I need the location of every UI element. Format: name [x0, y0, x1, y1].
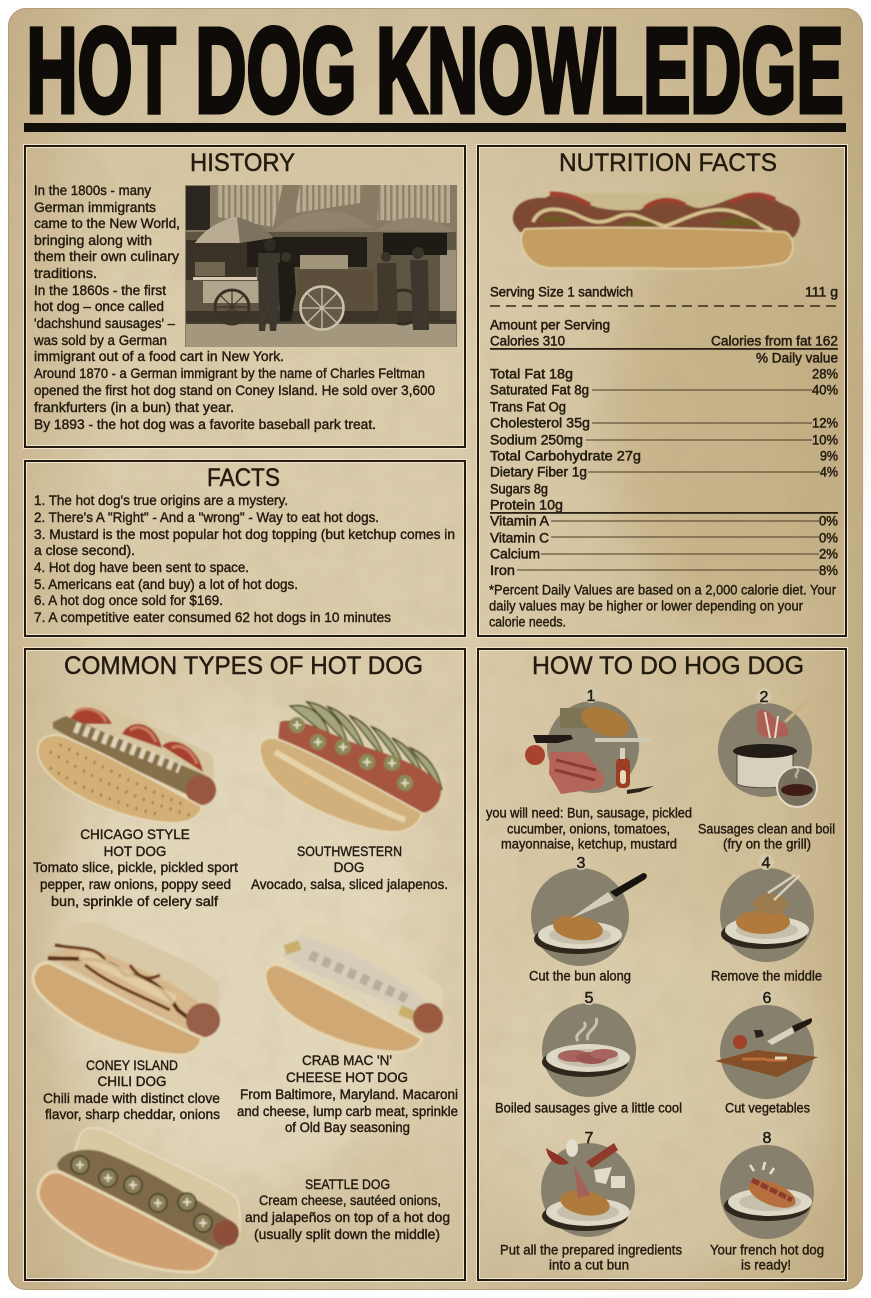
text: coney island: CONEY ISLAND: [86, 1058, 178, 1073]
text: southwestern: Avocado, salsa, sliced jalapenos.: [251, 877, 448, 892]
nutrition label: Vitamin A: [490, 514, 549, 528]
history text: hot dog – once called: [34, 299, 164, 314]
nutrition label: Trans Fat Og: [490, 400, 566, 414]
step 5 icon: boiled sausages: 5: [585, 990, 594, 1007]
facts list: 7. A competitive eater consumed 62 hot dogs in 10 minutes: [34, 610, 391, 625]
panel: history: [25, 146, 465, 447]
text: chicago style: pepper, raw onions, poppy seed: [40, 877, 231, 892]
heading: nutrition facts: NUTRITION FACTS: [559, 149, 777, 177]
step 8 icon: finished hot dog: [720, 1129, 814, 1239]
step 1 text: [486, 806, 692, 852]
illustration: hot dog: [513, 193, 800, 269]
step 4 icon: remove the middle: 4: [762, 855, 771, 872]
facts list: 4. Hot dog have been sent to space.: [34, 560, 249, 575]
history text: opened the first hot dog stand on Coney Island. He sold over 3,600: [34, 383, 435, 398]
text: chicago style: Tomato slice, pickle, pickled sport: [33, 860, 238, 875]
nutrition label: Iron: [490, 563, 515, 578]
step 8 icon: finished hot dog: 8: [763, 1130, 772, 1147]
step 6 icon: cut vegetables: 6: [763, 990, 772, 1007]
text: crab mac: CHEESE HOT DOG: [286, 1070, 408, 1085]
history text: German immigrants: [34, 200, 156, 215]
nutrition label: 8%: [819, 563, 838, 578]
illustration: seattle dog: [38, 1128, 240, 1272]
text: seattle dog: Cream cheese, sautéed onions,: [259, 1193, 441, 1208]
history text: bringing along with: [34, 233, 152, 248]
step 1 icon: ingredients: [525, 687, 654, 794]
nutrition label: Amount per Serving: [490, 318, 610, 332]
step 8 text: [710, 1242, 824, 1272]
nutrition label: Total Carbohydrate 27g: [490, 448, 641, 464]
nutrition label: Calcium: [490, 546, 540, 562]
text: southwestern: SOUTHWESTERN: [297, 844, 402, 859]
illustration: coney island chili dog: [33, 922, 220, 1055]
text: crab mac: of Old Bay seasoning: [285, 1120, 410, 1135]
nutrition label: 111 g: [805, 284, 838, 300]
step 4 text: Remove the middle: [711, 968, 822, 984]
heading: facts: FACTS: [207, 464, 280, 492]
nutrition label: 10%: [812, 432, 838, 448]
step 7 text: [500, 1242, 682, 1272]
text: crab mac: From Baltimore, Maryland. Macaroni: [240, 1087, 458, 1102]
history text: [33, 183, 435, 432]
history text: In the 1800s - many: [34, 183, 151, 198]
step 8 text: is ready!: [741, 1258, 791, 1272]
step 3 text: Cut the bun along: [529, 968, 631, 984]
text: seattle dog: SEATTLE DOG: [305, 1177, 390, 1192]
facts list: 3. Mustard is the most popular hot dog topping (but ketchup comes in: [34, 527, 455, 542]
heading: how to: HOW TO DO HOG DOG: [532, 652, 804, 680]
nutrition label: 0%: [819, 530, 838, 546]
step 8 text: Your french hot dog: [710, 1242, 824, 1258]
text: chicago style: bun, sprinkle of celery salf: [51, 894, 218, 909]
nutrition label: 4%: [820, 464, 838, 480]
panel: how to do hog dog: [478, 649, 846, 1280]
step 1 icon: ingredients: 1: [587, 688, 596, 705]
step 1 text: mayonnaise, ketchup, mustard: [501, 836, 677, 852]
step 7 icon: prepared ingredients: [541, 1130, 635, 1237]
panel: nutrition facts: [478, 146, 846, 636]
facts list: 5. Americans eat (and buy) a lot of hot dogs.: [34, 577, 298, 592]
facts list: 1. The hot dog's true origins are a mystery.: [34, 493, 288, 508]
nutrition label: Saturated Fat 8g: [490, 382, 589, 398]
history text: them their own culinary: [34, 249, 179, 264]
step 3 icon: cut bun: 3: [577, 855, 586, 872]
text: crab mac: and cheese, lump carb meat, sprinkle: [237, 1104, 458, 1119]
nutrition label: Calories 310: [490, 334, 565, 348]
facts list: 6. A hot dog once sold for $169.: [34, 593, 223, 608]
nutrition label: Vitamin C: [490, 530, 549, 546]
step 2 icon: boil: [718, 688, 817, 807]
text: chicago style: [33, 827, 238, 909]
text: seattle dog: [245, 1177, 450, 1242]
history text: Around 1870 - a German immigrant by the name of Charles Feltman: [34, 366, 425, 381]
history text: In the 1860s - the first: [34, 283, 166, 298]
step 1 text: you will need: Bun, sausage, pickled: [486, 806, 692, 820]
step 1 text: cucumber, onions, tomatoes,: [507, 822, 670, 836]
text: coney island: [43, 1058, 220, 1122]
history text: By 1893 - the hot dog was a favorite baseball park treat.: [34, 417, 376, 432]
text: chicago style: CHICAGO STYLE: [80, 827, 190, 842]
text: southwestern: DOG: [334, 860, 364, 875]
nutrition label: 0%: [819, 514, 838, 528]
panel: common types of hot dog: [25, 649, 465, 1280]
text: crab mac: CRAB MAC 'N': [302, 1053, 392, 1068]
step 3 icon: cut bun: [531, 854, 647, 966]
text: chicago style: HOT DOG: [104, 844, 166, 859]
step 4 icon: remove the middle: [720, 854, 814, 962]
nutrition label: 12%: [812, 416, 838, 430]
nutrition label: 9%: [820, 448, 838, 464]
nutrition label: [490, 284, 838, 578]
footnote: [489, 582, 836, 630]
text: seattle dog: (usually split down the middle): [254, 1227, 440, 1242]
text: seattle dog: and jalapeños on top of a hot dog: [245, 1210, 450, 1225]
photo: hot dog cart: [185, 185, 457, 347]
step 2 text: Sausages clean and boil: [698, 822, 835, 836]
panel: facts: [25, 461, 465, 636]
step 6 text: Cut vegetables: [725, 1100, 810, 1116]
nutrition label: % Daily value: [756, 350, 838, 366]
nutrition label: 28%: [812, 366, 838, 382]
step 2 text: [698, 822, 835, 852]
nutrition label: Cholesterol 35g: [490, 416, 590, 430]
history text: was sold by a German: [33, 333, 167, 348]
history text: traditions.: [34, 266, 97, 281]
heading: common types: COMMON TYPES OF HOT DOG: [64, 652, 423, 680]
illustration: crab mac and cheese hot dog: [265, 923, 443, 1052]
history text: 'dachshund sausages' –: [34, 316, 175, 331]
facts list: 2. There's A "Right" - And a "wrong" - Way to eat hot dogs.: [34, 510, 379, 525]
footnote: calorie needs.: [489, 614, 566, 630]
facts list: [34, 493, 455, 625]
step 7 text: into a cut bun: [549, 1258, 629, 1272]
history text: came to the New World,: [34, 216, 180, 231]
text: southwestern: [251, 844, 448, 892]
nutrition label: Dietary Fiber 1g: [490, 464, 587, 480]
step 5 text: Boiled sausages give a little cool: [495, 1100, 682, 1116]
nutrition label: Protein 10g: [490, 498, 563, 512]
nutrition label: 40%: [812, 382, 838, 398]
text: coney island: CHILI DOG: [97, 1074, 167, 1089]
heading: history: HISTORY: [190, 149, 295, 177]
step 2 text: (fry on the grill): [723, 836, 811, 852]
nutrition label: Calories from fat 162: [711, 334, 838, 348]
facts list: a close second).: [34, 543, 135, 558]
nutrition label: 2%: [819, 546, 838, 562]
step 7 icon: prepared ingredients: 7: [585, 1130, 594, 1147]
step 6 icon: cut vegetables: [715, 989, 818, 1099]
footnote: daily values may be higher or lower depending on your: [489, 598, 803, 614]
nutrition label: Serving Size 1 sandwich: [490, 284, 633, 300]
history text: frankfurters (in a bun) that year.: [34, 400, 234, 415]
nutrition label: Sugars 8g: [490, 482, 548, 496]
footnote: *Percent Daily Values are based on a 2,000 calorie diet. Your: [489, 582, 836, 598]
text: crab mac: [237, 1053, 458, 1135]
step 7 text: Put all the prepared ingredients: [500, 1242, 682, 1258]
nutrition label: Sodium 250mg: [490, 432, 583, 448]
text: coney island: flavor, sharp cheddar, onions: [45, 1107, 220, 1122]
text: coney island: Chili made with distinct clove: [43, 1091, 220, 1106]
illustration: southwestern dog: [260, 702, 445, 832]
history text: immigrant out of a food cart in New York.: [34, 349, 284, 364]
illustration: chicago style hot dog: [38, 700, 216, 823]
step 2 icon: boil: 2: [760, 689, 769, 706]
nutrition label: Total Fat 18g: [490, 366, 573, 382]
step 5 icon: boiled sausages: [542, 989, 636, 1097]
